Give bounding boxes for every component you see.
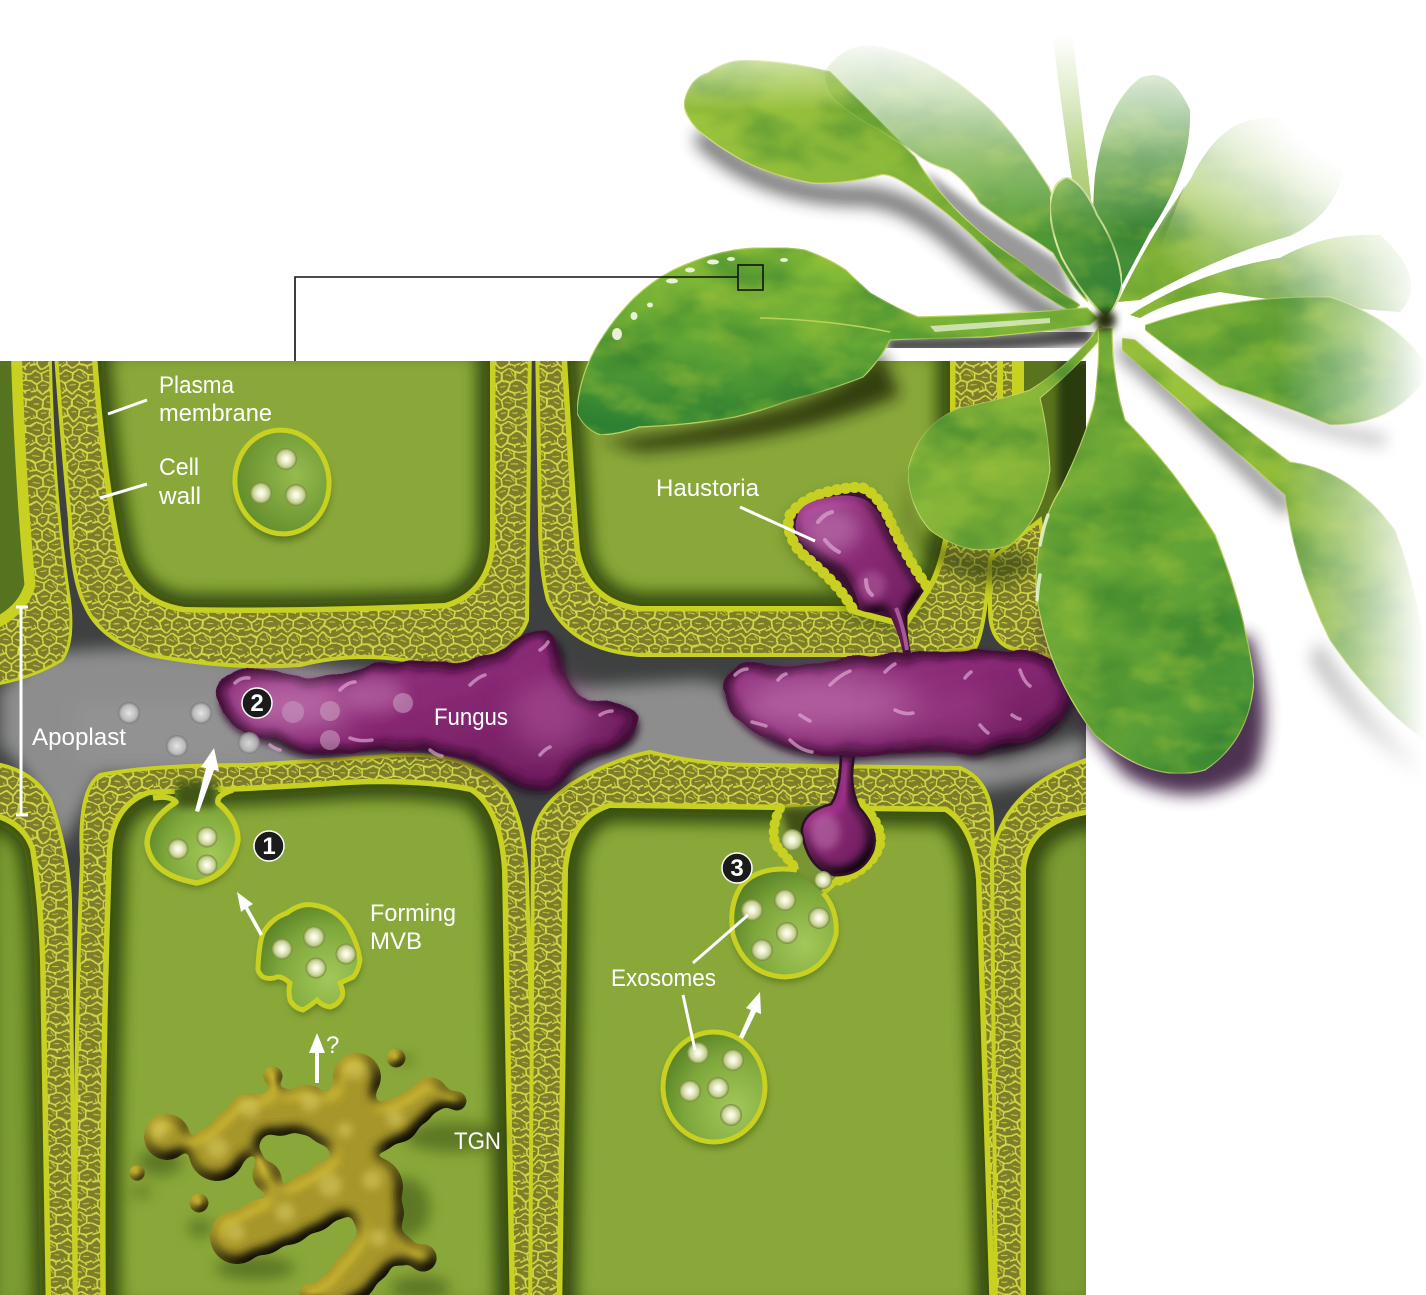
arrow: forming MVB to budding <box>237 892 263 936</box>
TGN organelle <box>128 1048 467 1295</box>
shadows cast on white by plant <box>705 140 1380 505</box>
haustorium bottom: membrane and body <box>774 755 881 893</box>
inset box on leaf <box>738 265 763 290</box>
fan: upper right leaves <box>1118 117 1411 318</box>
labels: Haustoria <box>656 475 760 502</box>
big leaf edge highlights <box>1037 515 1048 600</box>
apoplast bracket <box>16 607 28 815</box>
fan: right leaf <box>1130 235 1411 318</box>
fungus left <box>219 631 638 793</box>
apoplast background <box>0 361 1086 1103</box>
TGN highlights <box>151 1060 404 1247</box>
leader lines <box>100 400 815 1050</box>
step 3: 3 <box>730 855 744 882</box>
labels: Apoplast <box>32 724 126 751</box>
step 1: 1 <box>262 833 276 860</box>
centre small leaf <box>1050 177 1122 318</box>
leaf 1: upper left, faded at top <box>684 60 1080 312</box>
vesicle: top cell MVB <box>228 424 336 541</box>
vesicle: lower MVB <box>663 1032 767 1148</box>
fan: upper right leaf <box>1118 117 1345 302</box>
TGN body <box>128 1048 467 1295</box>
vesicle: budding MVB 1 <box>147 782 238 888</box>
leaf: right lower with stem <box>1122 338 1426 745</box>
wall and cell: bottom left <box>76 755 540 1295</box>
labels: membrane <box>159 400 272 427</box>
labels: Plasma <box>159 372 235 399</box>
leaf: big bottom <box>1036 328 1254 773</box>
exosomes released in apoplast <box>118 693 413 757</box>
step 1 <box>254 831 284 861</box>
step 2 <box>242 688 272 718</box>
haustorium top: membrane and body <box>786 487 928 653</box>
vesicle 3 fusing with haustorium membrane <box>732 829 837 982</box>
thin top stem <box>1052 30 1102 300</box>
exosome cluster <box>741 829 832 961</box>
vesicle: forming MVB <box>258 905 361 1015</box>
exosome cluster <box>272 926 356 978</box>
labels: MVB <box>370 928 422 955</box>
wall and cell: bottom far left <box>0 762 75 1295</box>
fan: upper dark leaf <box>1093 75 1190 310</box>
step 2: 2 <box>250 690 264 717</box>
wall and cell: top middle <box>55 340 530 666</box>
leaf: small lower <box>908 325 1106 550</box>
leaf 2 <box>825 45 1088 302</box>
leaf: far right <box>1145 297 1426 425</box>
wall and cell: bottom right <box>990 758 1086 1295</box>
labels: Forming <box>370 900 456 927</box>
arrow: lower MVB to vesicle 3 <box>739 992 761 1039</box>
leader line to leaf inset <box>295 265 763 361</box>
exosome cluster <box>679 1042 744 1126</box>
wall and cell: top right <box>537 340 1060 660</box>
labels: TGN <box>454 1128 501 1155</box>
labels: wall <box>158 483 201 510</box>
labels: Cell <box>159 454 199 481</box>
plant crown <box>1094 309 1116 331</box>
step 3 <box>722 853 752 883</box>
leaves in upper fan faded at top and corner <box>825 30 1411 318</box>
plant: all leaves with edge fades <box>577 30 1426 795</box>
wall and cell: bottom middle <box>530 752 1010 1295</box>
panel: cell cross-section <box>0 340 1110 1295</box>
exosome cluster <box>168 826 218 876</box>
arrow: exit to apoplast <box>195 748 219 812</box>
step markers <box>242 688 752 883</box>
arrows <box>195 748 761 1083</box>
labels: Exosomes <box>611 965 716 992</box>
arrow: TGN upward with question mark <box>309 1032 339 1083</box>
fungus right <box>722 649 1077 760</box>
labels <box>32 372 760 1155</box>
leaf A shadows on panel <box>600 350 1426 795</box>
exosome cluster <box>250 448 307 506</box>
wall and cell: top left <box>0 340 71 687</box>
labels: Fungus <box>434 704 508 731</box>
leaf A: large with inset box <box>577 248 1098 435</box>
TGN shadow <box>133 1055 505 1295</box>
arrow: TGN upward with question mark: ? <box>326 1032 339 1059</box>
leaf A highlights and midrib <box>612 257 1050 340</box>
